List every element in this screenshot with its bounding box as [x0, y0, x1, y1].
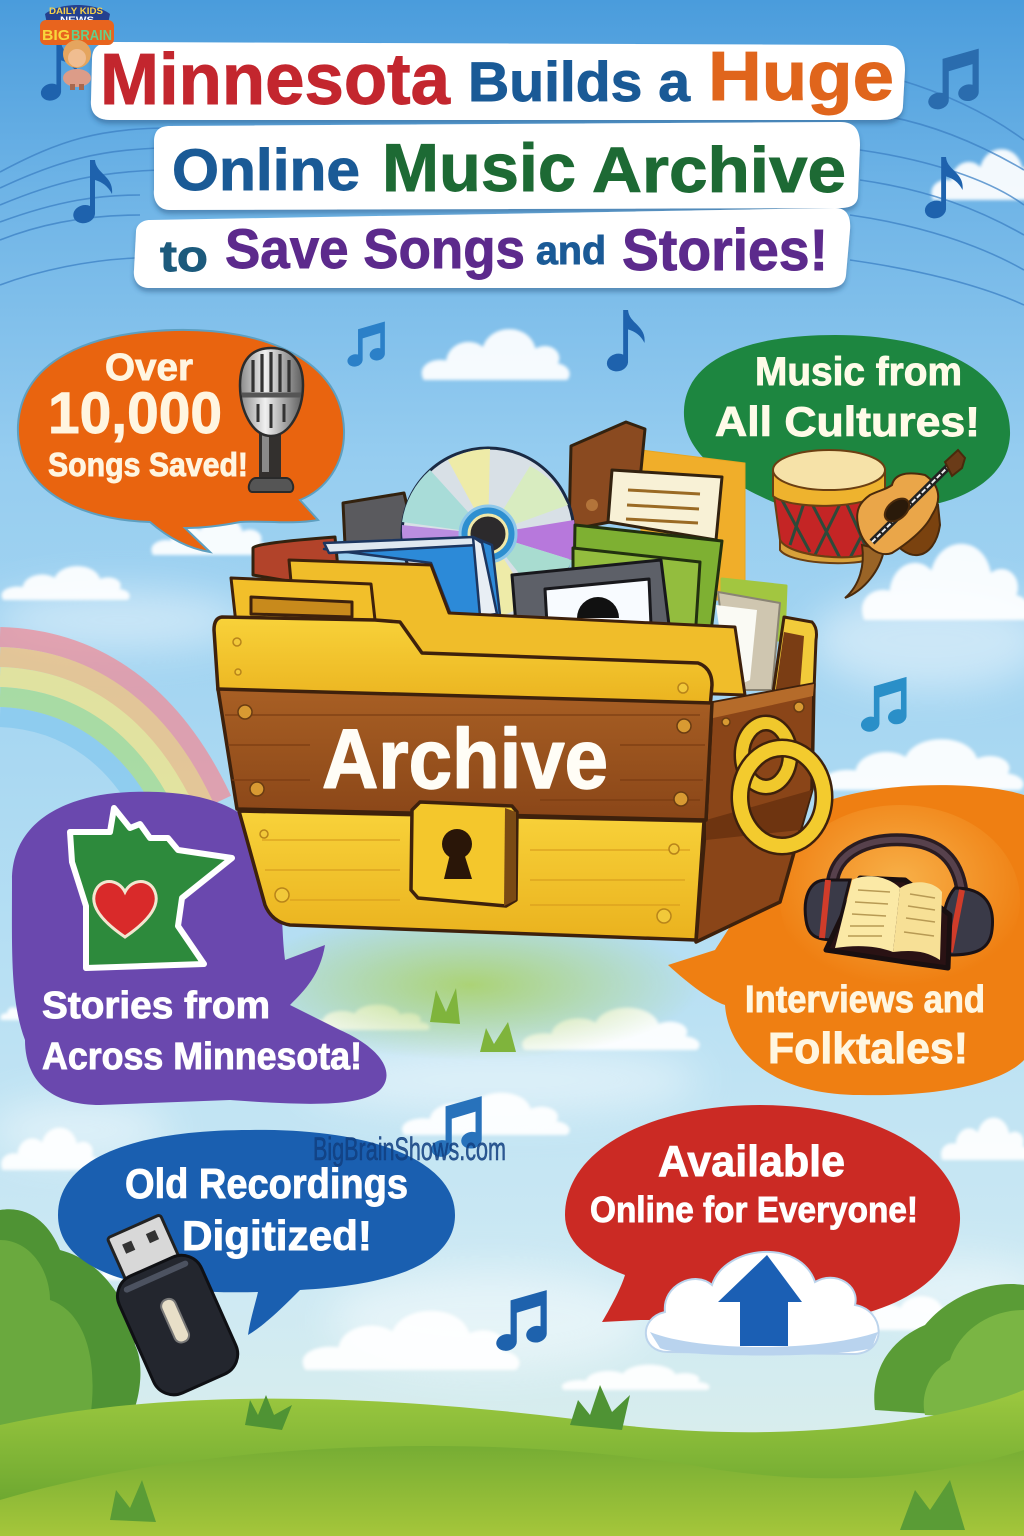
gold rings: [740, 723, 824, 846]
title line 3: and: [536, 229, 606, 273]
title line 3: Save Songs: [225, 217, 525, 280]
bubble text: [125, 1160, 408, 1259]
watermark: BigBrainShows.com: [313, 1131, 506, 1167]
rivets: [238, 702, 804, 806]
bubble shape: [565, 1105, 960, 1322]
bubble text: Old Recordings: [125, 1160, 408, 1207]
blue book: [324, 537, 500, 616]
icon: Minnesota map with heart: [70, 808, 232, 968]
bubble text: Over: [105, 347, 193, 389]
title line 1: Minnesota: [100, 40, 451, 120]
bubble: stories from across Minnesota: [12, 792, 387, 1105]
label: Archive: Archive: [322, 712, 608, 806]
bubble text: Interviews and: [745, 979, 985, 1021]
title line 3: Stories!: [622, 218, 828, 283]
bubble: music from all cultures: [684, 335, 1010, 598]
music staff lines: [0, 80, 1024, 305]
front folder: [214, 617, 712, 708]
bubble text: [745, 979, 985, 1073]
title line 3: [160, 217, 828, 283]
icon: headphones and book: [805, 840, 993, 968]
title: [91, 37, 905, 288]
right back wall: [772, 617, 816, 700]
back items: [253, 422, 786, 640]
bubble shape: [18, 330, 344, 552]
meadow patch below chest: [240, 910, 700, 1060]
lower yellow front: [239, 811, 704, 940]
bubble text: Folktales!: [768, 1024, 968, 1073]
logo: Daily Kids News Big Brain: BIG: [42, 27, 70, 44]
bubble text: Songs Saved!: [48, 446, 248, 483]
rear yellow folders: [231, 560, 745, 695]
title line 3: to: [160, 232, 208, 281]
bubble text: Stories from: [42, 985, 270, 1027]
logo: Daily Kids News Big Brain: BRAIN: [71, 27, 112, 44]
title plates: [91, 42, 905, 288]
bubble shape: [684, 335, 1010, 530]
bubble: interviews and folktales: [668, 785, 1024, 1095]
green folders, paper and tablet: [512, 525, 780, 690]
rainbow: [0, 637, 222, 824]
soft haze in the sky: [0, 590, 1024, 1370]
logo: Daily Kids News Big Brain: NEWS: [60, 15, 94, 26]
bubble: available online: [565, 1105, 960, 1356]
icon: compact disc: [402, 448, 575, 620]
bubble text: All Cultures!: [715, 398, 980, 445]
grass tufts: [430, 988, 516, 1052]
brown band: [218, 689, 712, 820]
bubble text: [715, 350, 980, 445]
bubble shape: [668, 785, 1024, 1095]
bubble shape: [12, 792, 387, 1105]
bubble text: [42, 985, 362, 1078]
bubble text: [590, 1137, 918, 1230]
bubble text: Across Minnesota!: [42, 1036, 362, 1078]
music notes: [41, 42, 979, 1351]
icon: USB drive: [93, 1208, 245, 1402]
title line 1: Huge: [708, 37, 894, 115]
icon: cloud upload: [646, 1252, 879, 1356]
title line 2: [172, 130, 846, 206]
bubble: old recordings digitized: [58, 1130, 455, 1402]
bubble text: Online for Everyone!: [590, 1189, 918, 1230]
title line 1: [100, 37, 894, 120]
archive chest: [214, 422, 824, 942]
bubble: over 10,000 songs: [18, 330, 344, 552]
icon: microphone: [240, 348, 303, 492]
bubble text: Digitized!: [182, 1212, 372, 1259]
bubble shape: [58, 1130, 455, 1335]
title line 1: Builds a: [468, 50, 691, 113]
side panel: [696, 684, 814, 942]
logo: Daily Kids News Big Brain: DAILY KIDS: [49, 6, 103, 16]
icon: guitar: [845, 450, 965, 598]
bubble text: Music from: [755, 350, 962, 394]
title line 2: Archive: [592, 134, 846, 206]
bubble text: Available: [658, 1137, 845, 1186]
hills and bushes: [0, 1209, 1024, 1536]
logo: Daily Kids News Big Brain: [40, 5, 114, 90]
lock with keyhole: [411, 802, 517, 906]
bubble text: [48, 347, 248, 483]
bubble text: 10,000: [48, 381, 222, 446]
icon: drum: [773, 450, 885, 563]
title line 2: Online: [172, 138, 360, 203]
title line 2: Music: [382, 130, 576, 206]
